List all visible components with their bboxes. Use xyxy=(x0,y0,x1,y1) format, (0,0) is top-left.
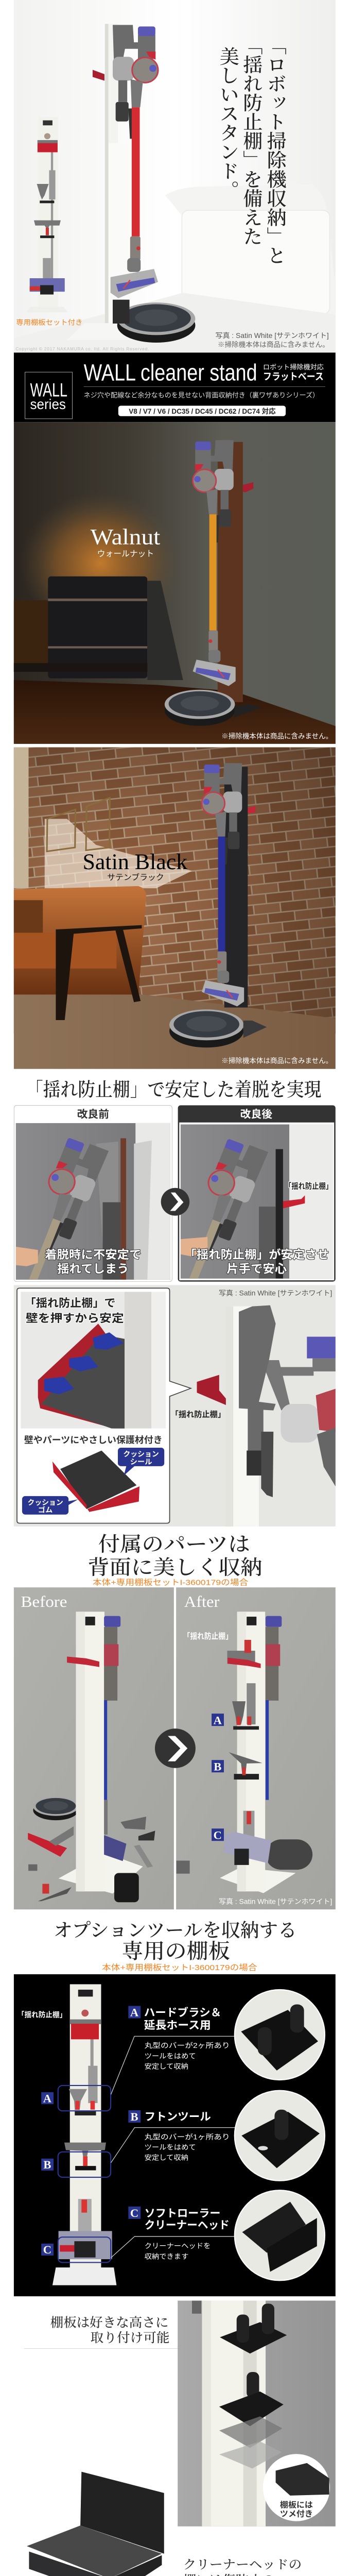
text block B xyxy=(128,2110,230,2161)
black panel xyxy=(14,1974,336,2296)
highlight frames xyxy=(58,2086,111,2262)
WALL series logo: WALL xyxy=(30,379,67,400)
text block A: 安定して収納 xyxy=(145,2062,188,2071)
badges: A xyxy=(43,2092,51,2105)
compatibility pill: V8 / V7 / V6 / DC35 / DC45 / DC62 / DC74 対応 xyxy=(129,407,276,415)
icon: red anti-sway shelf xyxy=(93,70,104,81)
card: before improvement: 改良前 xyxy=(77,1109,109,1120)
arrow xyxy=(155,1728,196,1768)
panel: after: After xyxy=(184,1592,220,1611)
vertical headline: 「ロボット掃除機収納」と xyxy=(262,36,291,265)
panel: shelf closeup xyxy=(14,1285,336,1527)
walnut label xyxy=(91,525,160,558)
hero backdrop xyxy=(14,0,336,352)
shelf label: 「揺れ防止棚」 xyxy=(171,1410,225,1419)
floor xyxy=(14,994,336,1069)
text block C: 収納できます xyxy=(145,2252,188,2260)
vacuum xyxy=(193,440,236,686)
text block A: ツールをはめて xyxy=(145,2052,196,2060)
panel: black product header xyxy=(14,352,336,422)
subtitle xyxy=(263,363,324,382)
photo caption: 写真 : Satin White [サテンホワイト] xyxy=(215,332,329,340)
WALL series logo: series xyxy=(30,396,66,412)
panel: after: 「揺れ防止棚」 xyxy=(183,1632,233,1641)
text block B: フトンツール xyxy=(145,2111,211,2123)
vacuum bin and handle xyxy=(281,1389,336,1486)
walnut label: Walnut xyxy=(91,525,160,549)
photo background xyxy=(14,1285,336,1527)
text block A: 延長ホース用 xyxy=(144,2019,211,2031)
leader lines xyxy=(111,2036,236,2258)
text block A xyxy=(128,2006,230,2071)
robot xyxy=(169,1009,243,1047)
callout card: 壁を押すから安定 xyxy=(26,1312,124,1325)
text: any height: 棚板は好きな高さに xyxy=(50,2312,168,2331)
text: protective material: クリーナーヘッドの xyxy=(183,2555,302,2573)
vacuum xyxy=(111,25,158,298)
shelf label: 「揺れ防止棚」 xyxy=(18,2010,66,2019)
panel: walnut photo xyxy=(14,422,336,744)
panel: after xyxy=(176,1587,336,1909)
text block B: 安定して収納 xyxy=(145,2154,188,2161)
vertical headline: 「揺れ防止棚」を備えた xyxy=(239,36,267,246)
lamp glow xyxy=(20,492,181,635)
callout card: 壁やパーツにやさしい保護材付き xyxy=(24,1435,163,1445)
text block C xyxy=(128,2207,230,2260)
small stand with shelf set xyxy=(27,117,67,312)
label: shelf set included: 専用棚板セット付き xyxy=(16,318,82,326)
inset: shelf claws: ツメ付き xyxy=(280,2510,313,2519)
callout card: シール xyxy=(130,1458,152,1466)
robot vacuum xyxy=(117,302,195,343)
badges A B C xyxy=(212,1714,224,1841)
callout card: ゴム xyxy=(38,1506,52,1514)
satin black label: サテンブラック xyxy=(107,872,164,882)
vertical headline xyxy=(215,36,291,265)
subtitle: ロボット掃除機対応 xyxy=(263,363,324,371)
brick wall xyxy=(14,747,336,1033)
wall xyxy=(14,422,336,744)
black leather chair xyxy=(14,577,183,680)
orange note: 本体+専用棚板セットI-3600179の場合 xyxy=(102,1963,257,1972)
badges A B C: A xyxy=(214,1714,222,1726)
floor xyxy=(14,680,336,744)
text block B: 丸型のバーが1ヶ所あり xyxy=(145,2133,230,2141)
note: ※掃除機本体は商品に含みません。 xyxy=(218,341,329,348)
badges xyxy=(41,2092,54,2256)
vertical headline: 美しいスタンド。 xyxy=(215,46,243,199)
light patch xyxy=(45,819,192,888)
text block A: A xyxy=(130,2006,138,2019)
bracket and tools xyxy=(239,1306,276,1497)
detail circle B xyxy=(235,2091,325,2181)
panel: satin black photo xyxy=(14,747,336,1069)
callout card: 「揺れ防止棚」で xyxy=(25,1297,116,1309)
badges A B C: C xyxy=(214,1829,222,1841)
subtitle: フラットベース xyxy=(263,371,324,382)
heading xyxy=(87,1529,262,1581)
section: option tool shelves xyxy=(14,1915,336,2296)
shelf photo xyxy=(27,2472,174,2576)
satin black label: Satin Black xyxy=(82,850,187,874)
inset: shelf claws xyxy=(263,2454,330,2521)
note: ※掃除機本体は商品に含みません。 xyxy=(221,1057,332,1064)
badges: C xyxy=(43,2243,51,2256)
vacuum body top xyxy=(261,1337,336,1411)
left plaster column xyxy=(14,747,29,888)
vacuum xyxy=(202,763,244,1006)
callout card: クッション xyxy=(27,1498,63,1506)
note: ※掃除機本体は商品に含みません。 xyxy=(221,732,332,740)
tool set xyxy=(59,2066,112,2259)
copyright: Copyright © 2017 NAKAMURA co. ltd. All Rights Reserved. xyxy=(15,347,149,351)
inset: shelf claws: 棚板には xyxy=(280,2500,313,2510)
text block C: クリーナーヘッド xyxy=(145,2219,230,2231)
detail circle A xyxy=(235,1990,325,2080)
sofa xyxy=(14,184,336,352)
card: after improvement: 片手で安心 xyxy=(226,1262,287,1275)
walnut panel xyxy=(218,442,243,702)
photo caption: 写真 : Satin White [サテンホワイト] xyxy=(219,1290,332,1297)
badges: B xyxy=(43,2158,51,2171)
photo xyxy=(178,2301,336,2527)
red shelf xyxy=(197,1375,226,1405)
panel: before: Before xyxy=(21,1592,67,1611)
WALL series logo xyxy=(25,372,73,419)
heading xyxy=(54,1915,297,1964)
badges A B C: B xyxy=(214,1760,222,1773)
section: adjustable shelf xyxy=(24,2301,336,2576)
text block B: ツールをはめて xyxy=(145,2143,196,2151)
text block A: ハードブラシ＆ xyxy=(144,2006,221,2019)
text: any height: 取り付け可能 xyxy=(91,2327,170,2346)
card: before improvement xyxy=(13,1105,172,1282)
card: after improvement xyxy=(178,1105,336,1282)
detail circle C xyxy=(235,2190,325,2280)
callout card: クッション xyxy=(123,1450,159,1458)
robot dock xyxy=(113,300,130,324)
text block C: クリーナーヘッドを xyxy=(145,2242,211,2250)
card: before improvement: 着脱時に不安定で xyxy=(45,1248,141,1261)
text block C: ソフトローラー xyxy=(145,2207,220,2219)
heading: 付属のパーツは xyxy=(98,1529,250,1557)
section: rear storage xyxy=(14,1529,336,1909)
picture frames xyxy=(47,798,110,852)
card: after improvement: 「揺れ防止棚」が安定させ xyxy=(184,1248,329,1261)
walnut label: ウォールナット xyxy=(97,549,154,558)
heading: オプションツールを収納する xyxy=(54,1915,297,1942)
heading: 専用の棚板 xyxy=(121,1935,230,1964)
panel: before xyxy=(14,1587,174,1909)
text block A: 丸型のバーが2ヶ所あり xyxy=(145,2041,230,2049)
text block B: B xyxy=(131,2110,138,2123)
text block C: C xyxy=(130,2207,138,2219)
base plate xyxy=(243,1021,267,1038)
stand column xyxy=(52,1984,116,2285)
shelf xyxy=(243,482,253,492)
product title: WALL cleaner stand xyxy=(84,359,257,385)
robot xyxy=(165,690,235,726)
base plate xyxy=(234,704,261,717)
tagline: ネジ穴や配線など余分なものを見せない背面収納付き（裏ワザありシリーズ） xyxy=(84,392,319,399)
arrow xyxy=(161,1188,189,1216)
white stand column xyxy=(225,1307,259,1527)
callout card xyxy=(17,1288,191,1523)
heading: 背面に美しく収納 xyxy=(87,1552,262,1581)
leather sofa xyxy=(14,886,146,1020)
heading: 「揺れ防止棚」で安定した着脱を実現 xyxy=(26,1074,321,1101)
card: before improvement: 揺れてしまう xyxy=(57,1262,129,1275)
stand panel xyxy=(67,24,143,340)
card: after improvement: 改良後 xyxy=(240,1109,273,1120)
orange note: 本体+専用棚板セットI-3600179の場合 xyxy=(93,1578,248,1587)
panel: hero photo xyxy=(14,0,336,352)
shelf xyxy=(248,806,256,814)
card: after improvement: 「揺れ防止棚」 xyxy=(285,1182,332,1191)
photo caption: 写真 : Satin White [サテンホワイト] xyxy=(219,1898,332,1906)
text: any height xyxy=(50,2312,170,2346)
section: anti-sway shelf xyxy=(13,1080,336,1282)
black panel xyxy=(224,767,248,1008)
